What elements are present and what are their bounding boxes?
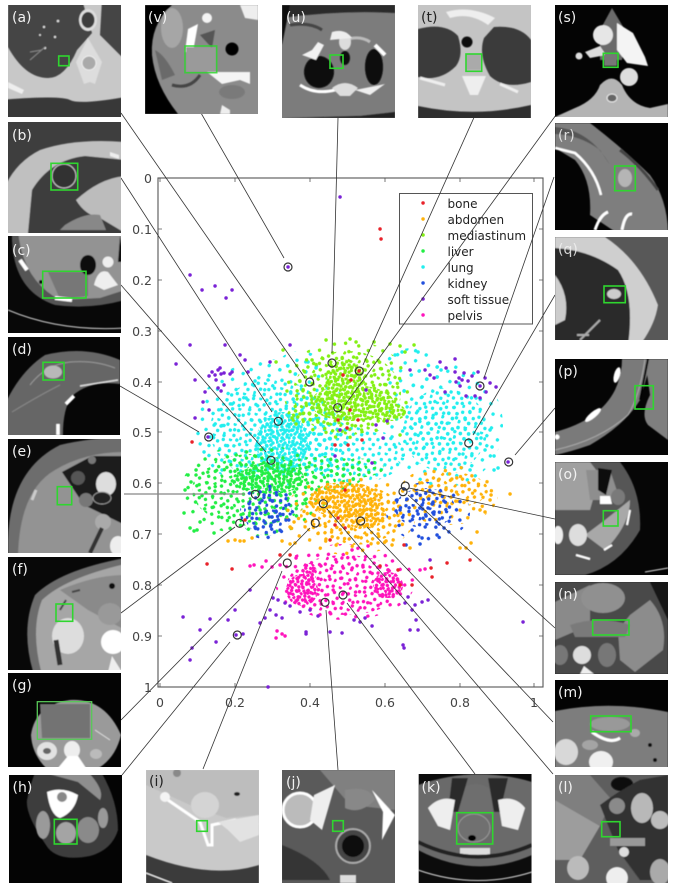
legend: lung xyxy=(448,261,474,275)
y axis labels: 0.2 xyxy=(132,273,152,288)
points: mediastinum xyxy=(276,339,414,440)
y axis labels: 0.8 xyxy=(132,578,152,593)
thumbnail (k): prostate and bladder region: (k) xyxy=(422,780,441,796)
x axis labels: 0.4 xyxy=(300,695,320,710)
y axis labels: 1 xyxy=(144,680,152,695)
thumbnail (l): abdominal lymph node: (l) xyxy=(558,780,573,796)
x axis labels: 0.6 xyxy=(375,695,395,710)
leader lines xyxy=(120,113,556,775)
points: kidney xyxy=(240,482,470,545)
highlighted sample circles xyxy=(205,263,513,639)
thumbnail (g): abdominal mass: (g) xyxy=(12,678,32,694)
thumbnail (b): lung lesion xyxy=(8,122,121,233)
thumbnail (d): soft tissue mass xyxy=(8,337,120,435)
plot frame xyxy=(158,178,543,687)
legend: kidney xyxy=(448,277,488,291)
thumbnail (h): thigh mass: (h) xyxy=(12,780,32,796)
thumbnail (s): mediastinal node xyxy=(555,5,668,117)
legend: mediastinum xyxy=(448,229,526,243)
y axis labels: 0.7 xyxy=(132,527,152,542)
points: abdomen xyxy=(228,465,510,555)
y axis labels: 0.9 xyxy=(132,629,152,644)
x axis labels xyxy=(156,695,538,710)
thumbnail (g): abdominal mass xyxy=(8,673,121,767)
legend xyxy=(400,194,532,324)
thumbnail (p): chest wall lesion: (p) xyxy=(558,364,578,380)
legend: pelvis xyxy=(448,309,483,323)
thumbnail (v): neck lesion: (v) xyxy=(148,10,167,26)
y axis labels: 0.3 xyxy=(132,324,152,339)
thumbnail (a): lung nodule: (a) xyxy=(12,10,32,26)
thumbnail (u): mediastinal node: (u) xyxy=(286,10,306,26)
y axis labels xyxy=(132,171,152,695)
thumbnail (k): prostate and bladder region xyxy=(418,774,532,883)
thumbnail (n): adrenal region lesion: (n) xyxy=(558,587,578,603)
legend: soft tissue xyxy=(448,293,509,307)
thumbnail (f): kidney region lesion: (f) xyxy=(12,562,28,578)
thumbnail (l): abdominal lymph node xyxy=(555,775,668,883)
thumbnail (u): mediastinal node xyxy=(282,5,395,118)
thumbnail (i): bone lesion xyxy=(146,770,259,883)
x axis labels: 0.8 xyxy=(450,695,470,710)
thumbnail (b): lung lesion: (b) xyxy=(12,128,32,144)
thumbnail (o): spleen lesion: (o) xyxy=(558,467,578,483)
thumbnail (t): paravertebral lesion: (t) xyxy=(421,10,437,26)
thumbnail (c): liver lesion xyxy=(8,236,121,333)
thumbnail (m): bowel lesion xyxy=(555,680,668,767)
thumbnail (e): liver lesion: (e) xyxy=(12,444,32,460)
thumbnail (v): neck lesion xyxy=(145,5,258,114)
x axis labels: 0.2 xyxy=(225,695,245,710)
thumbnail (s): mediastinal node: (s) xyxy=(558,10,576,26)
x axis labels: 1 xyxy=(530,695,538,710)
thumbnail (p): chest wall lesion xyxy=(555,359,668,455)
thumbnail (r): chest wall lesion xyxy=(555,123,668,230)
thumbnail (d): soft tissue mass: (d) xyxy=(12,342,32,358)
thumbnail (j): pelvic lesion: (j) xyxy=(286,775,301,791)
thumbnail (a): lung nodule xyxy=(8,5,121,117)
thumbnail (m): bowel lesion: (m) xyxy=(558,685,583,701)
points: soft tissue xyxy=(176,197,523,687)
y axis labels: 0.5 xyxy=(132,425,152,440)
legend: liver xyxy=(448,245,474,259)
thumbnail (i): bone lesion: (i) xyxy=(149,774,164,790)
thumbnail (j): pelvic lesion xyxy=(282,770,395,883)
thumbnail (t): paravertebral lesion xyxy=(418,5,531,118)
y axis labels: 0 xyxy=(144,171,152,186)
x axis labels: 0 xyxy=(156,695,164,710)
thumbnail (o): spleen lesion xyxy=(555,462,668,575)
points: pelvis xyxy=(250,544,425,638)
y axis labels: 0.6 xyxy=(132,476,152,491)
thumbnail (q): lung nodule xyxy=(555,237,668,340)
points: liver xyxy=(181,444,384,536)
y axis labels: 0.1 xyxy=(132,222,152,237)
legend: bone xyxy=(448,197,477,211)
points: lung xyxy=(194,348,503,491)
thumbnail (n): adrenal region lesion xyxy=(555,582,668,674)
thumbnail (h): thigh mass xyxy=(9,775,122,883)
thumbnail (c): liver lesion: (c) xyxy=(12,243,31,259)
y axis labels: 0.4 xyxy=(132,375,152,390)
chart: scatter plot xyxy=(132,171,543,710)
thumbnail (f): kidney region lesion xyxy=(8,557,121,670)
legend: abdomen xyxy=(448,213,504,227)
thumbnail (r): chest wall lesion: (r) xyxy=(558,128,575,144)
thumbnail (q): lung nodule: (q) xyxy=(558,242,578,258)
points: bone xyxy=(192,229,470,585)
thumbnail (e): liver lesion xyxy=(8,439,121,553)
